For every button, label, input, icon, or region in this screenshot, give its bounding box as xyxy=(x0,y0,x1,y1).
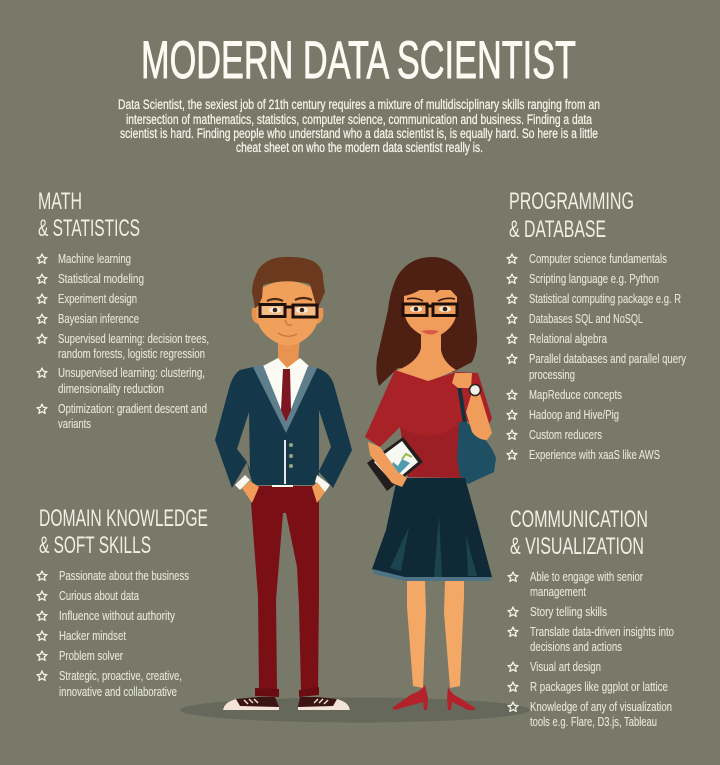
list: domain skills: Strategic, proactive, creative, xyxy=(59,668,182,683)
heading: communication and visualization: & VISUALIZATION xyxy=(510,533,644,560)
neck xyxy=(278,338,300,372)
heading: communication and visualization: COMMUNICATION xyxy=(510,506,648,533)
panel: communication and visualization xyxy=(508,506,674,729)
list: domain skills xyxy=(37,568,189,699)
heading: math and statistics xyxy=(38,188,140,242)
right hand on strap xyxy=(452,373,472,388)
list: domain skills: Influence without authority xyxy=(59,608,175,623)
skirt hem xyxy=(372,569,492,581)
left forearm and hand xyxy=(368,442,407,487)
list: programming skills: Relational algebra xyxy=(529,331,608,346)
right shoe xyxy=(298,697,350,710)
list: math skills: Bayesian inference xyxy=(58,311,139,326)
intro text block: cheat sheet on who the modern data scientist really is. xyxy=(236,140,483,155)
list: communication skills: Story telling skills xyxy=(530,604,607,619)
neck and chest xyxy=(396,335,456,382)
heading: math and statistics: & STATISTICS xyxy=(38,215,140,242)
panel: programming and database xyxy=(507,188,686,462)
left hand xyxy=(242,481,259,503)
ears xyxy=(252,308,323,324)
jacket xyxy=(215,367,352,488)
trouser cuffs xyxy=(255,687,319,697)
list: communication skills: Translate data-driven insights into xyxy=(530,624,674,639)
tablet xyxy=(367,437,423,491)
heading: programming and database xyxy=(509,188,634,243)
lapels xyxy=(253,365,317,433)
panel: math and statistics xyxy=(37,188,209,431)
list: communication skills xyxy=(508,569,674,729)
tie xyxy=(281,369,291,422)
panel: domain knowledge and soft skills xyxy=(37,505,208,699)
fringe xyxy=(400,270,462,298)
list: math skills: random forests, logistic regression xyxy=(58,346,205,361)
list: communication skills: R packages like ggplot or lattice xyxy=(530,679,668,694)
list: math skills xyxy=(37,251,209,431)
red top waist shading xyxy=(400,425,463,478)
face xyxy=(256,281,319,346)
illustration: male data scientist xyxy=(215,257,352,710)
list: programming skills: Hadoop and Hive/Pig xyxy=(529,407,619,422)
heading: domain knowledge and soft skills: DOMAIN KNOWLEDGE xyxy=(39,505,208,532)
heading: programming and database: & DATABASE xyxy=(509,216,606,243)
list: communication skills: management xyxy=(530,584,586,599)
list: math skills: Experiment design xyxy=(58,291,137,306)
list: domain skills: Passionate about the business xyxy=(59,568,189,583)
list: math skills: Statistical modeling xyxy=(58,271,144,286)
jacket buttons xyxy=(289,443,293,468)
list: domain skills: innovative and collaborative xyxy=(59,684,177,699)
eyes xyxy=(269,307,308,313)
illustration: female data scientist xyxy=(365,257,496,710)
glasses lenses xyxy=(260,304,317,317)
eyebrows xyxy=(407,298,455,301)
heading: domain knowledge and soft skills xyxy=(39,505,208,559)
hair back xyxy=(376,257,477,386)
glasses xyxy=(260,304,317,317)
list: math skills: dimensionality reduction xyxy=(58,381,164,396)
list: communication skills: tools e.g. Flare, D3.js, Tableau xyxy=(530,714,657,729)
left heel shoe xyxy=(392,685,428,710)
list: programming skills: Scripting language e.g. Python xyxy=(529,271,659,286)
list: communication skills: Visual art design xyxy=(530,659,601,674)
list: programming skills xyxy=(507,251,686,462)
list: communication skills: decisions and actions xyxy=(530,639,622,654)
skirt xyxy=(372,478,492,578)
hair xyxy=(252,257,325,308)
list: programming skills: Custom reducers xyxy=(529,427,602,442)
left shoe xyxy=(223,697,279,710)
heading: communication and visualization xyxy=(510,506,648,560)
red top xyxy=(365,370,492,478)
list: math skills: Supervised learning: decision trees, xyxy=(58,331,209,346)
right forearm xyxy=(466,392,492,440)
eyebrows xyxy=(267,298,312,301)
list: math skills: variants xyxy=(58,416,91,431)
heading: math and statistics: MATH xyxy=(38,188,82,215)
list: math skills: Machine learning xyxy=(58,251,131,266)
list: domain skills: Curious about data xyxy=(59,588,140,603)
trousers xyxy=(251,486,319,690)
list: math skills: Optimization: gradient descent and xyxy=(58,401,207,416)
right hand xyxy=(312,482,325,503)
intro text block: intersection of mathematics, statistics, computer science, communication and business. Finding a data xyxy=(126,112,592,127)
shirt xyxy=(263,358,310,424)
list: domain skills: Problem solver xyxy=(59,648,123,663)
list: programming skills: processing xyxy=(529,367,575,382)
jacket front line xyxy=(284,440,286,484)
bag xyxy=(457,385,496,484)
list: programming skills: MapReduce concepts xyxy=(529,387,622,402)
intro text block xyxy=(118,97,600,155)
heading: domain knowledge and soft skills: & SOFT SKILLS xyxy=(39,532,151,559)
lips xyxy=(421,330,439,334)
eyes xyxy=(410,306,451,312)
jacket arm gaps xyxy=(237,410,331,471)
ground shadow xyxy=(180,698,530,722)
face xyxy=(404,290,457,338)
list: math skills: Unsupervised learning: clustering, xyxy=(58,365,205,380)
list: communication skills: Able to engage with senior xyxy=(530,569,643,584)
list: domain skills: Hacker mindset xyxy=(59,628,126,643)
nose and mouth xyxy=(278,320,297,336)
list: programming skills: Databases SQL and NoSQL xyxy=(529,311,643,326)
list: programming skills: Experience with xaaS like AWS xyxy=(529,447,660,462)
right heel shoe xyxy=(447,687,475,710)
legs xyxy=(407,581,464,688)
watch xyxy=(470,384,480,396)
heading: programming and database: PROGRAMMING xyxy=(509,188,634,215)
shirt hem and cuffs xyxy=(235,475,330,492)
list: programming skills: Computer science fundamentals xyxy=(529,251,667,266)
glasses xyxy=(403,304,457,316)
skirt pleats xyxy=(390,515,477,577)
list: communication skills: Knowledge of any of visualization xyxy=(530,699,672,714)
